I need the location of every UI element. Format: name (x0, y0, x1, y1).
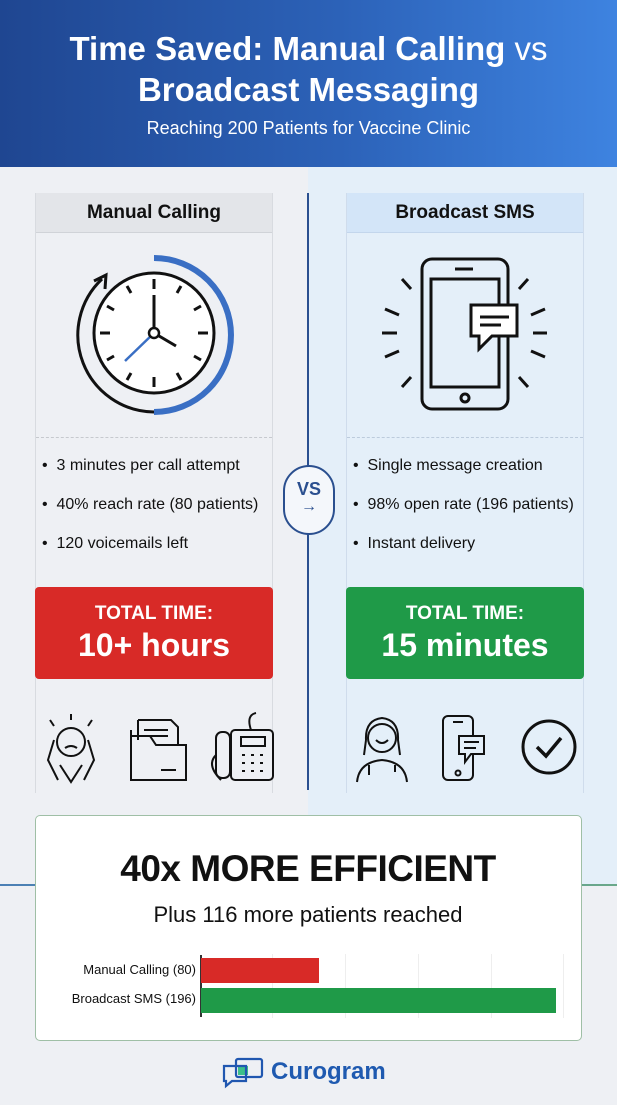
icon: phone with message (382, 258, 547, 410)
total time box: TOTAL TIME: (95, 603, 213, 624)
bar chart: Manual Calling (80) (83, 962, 196, 977)
total time box (346, 587, 584, 679)
VS badge (283, 465, 335, 535)
icons: doctor, phone message, check (356, 715, 576, 782)
total time box: 10+ hours (78, 627, 230, 663)
bullet list: • Single message creation (353, 457, 543, 474)
panel: broadcast sms (346, 193, 584, 793)
panel: manual calling (35, 193, 273, 793)
bullet list (42, 457, 258, 552)
bar chart (72, 954, 564, 1018)
heading: Manual Calling (87, 202, 221, 223)
bullet list: • 120 voicemails left (42, 535, 188, 552)
center divider (307, 193, 309, 790)
logo: Curogram (222, 1058, 386, 1088)
bar chart: Broadcast SMS (196) (72, 991, 196, 1006)
bullet list: • 40% reach rate (80 patients) (42, 496, 258, 513)
heading: Broadcast SMS (395, 202, 535, 223)
header banner (0, 0, 617, 167)
heading (347, 193, 583, 233)
bullet list: • Instant delivery (353, 535, 475, 552)
total time box: 15 minutes (381, 627, 549, 663)
icons: stress, folder, phone (46, 712, 274, 784)
panel: summary (35, 815, 582, 1041)
title: Time Saved: Manual Calling vs (69, 30, 548, 67)
VS badge: VS (297, 479, 321, 499)
total time box (35, 587, 273, 679)
VS badge: → (301, 498, 317, 515)
bullet list: • 98% open rate (196 patients) (353, 496, 574, 513)
subtitle: Reaching 200 Patients for Vaccine Clinic (147, 118, 470, 138)
bullet list: • 3 minutes per call attempt (42, 457, 240, 474)
subheadline: Plus 116 more patients reached (154, 902, 462, 927)
headline: 40x MORE EFFICIENT (120, 848, 496, 889)
right background (308, 167, 617, 885)
total time box: TOTAL TIME: (406, 603, 524, 624)
title (69, 30, 548, 108)
horizontal divider (0, 884, 617, 886)
icon: clock (76, 255, 234, 415)
bullet list (353, 457, 574, 552)
title: Broadcast Messaging (138, 71, 479, 108)
logo: Curogram: Curogram (271, 1058, 386, 1085)
heading (36, 193, 272, 233)
